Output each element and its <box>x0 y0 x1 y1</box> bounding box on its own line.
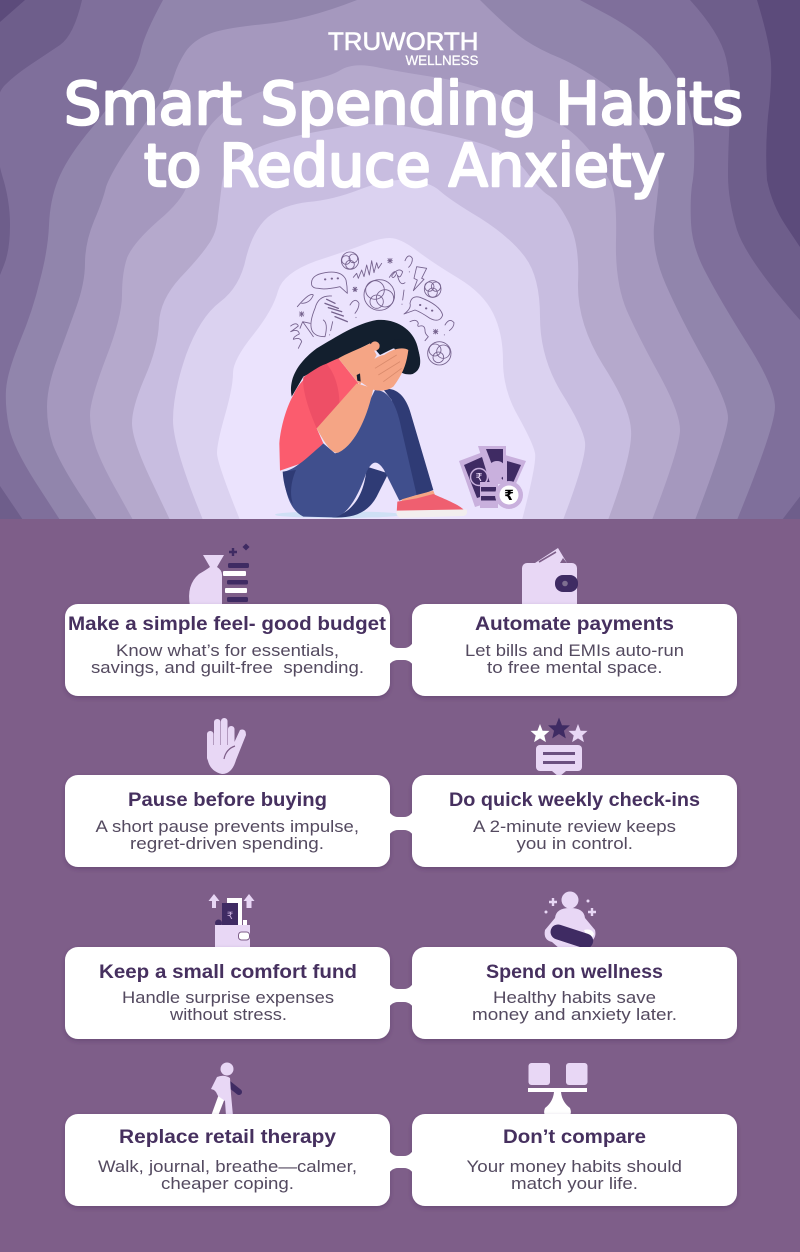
icon: walking person <box>211 1062 239 1116</box>
card: weekly check-ins <box>412 775 737 867</box>
icon: wallet with cash and arrows <box>208 894 254 949</box>
card: spend on wellness: Spend on wellness <box>486 962 663 983</box>
illustration: anxious woman with money <box>275 252 526 518</box>
icon: raised hand <box>207 718 246 774</box>
icon: balance scale <box>528 1063 588 1116</box>
anxious thought doodles <box>291 252 454 365</box>
connectors between cards <box>386 636 416 1179</box>
card: make a simple budget: Know what’s for essentials, <box>116 642 339 660</box>
rupee notes and coins: ₹ <box>476 471 482 484</box>
card: don't compare: match your life. <box>511 1175 638 1193</box>
card: spend on wellness: money and anxiety later. <box>472 1006 677 1024</box>
rupee notes and coins: ₹ <box>504 488 514 504</box>
card: replace retail therapy <box>65 1114 390 1206</box>
card: comfort fund <box>65 947 390 1039</box>
card: make a simple budget: Make a simple feel- good budget <box>68 614 387 635</box>
card: comfort fund: Keep a small comfort fund <box>99 962 357 983</box>
card: automate payments: Let bills and EMIs auto-run <box>465 642 684 660</box>
card: weekly check-ins: you in control. <box>516 835 633 853</box>
card: pause before buying: regret-driven spending. <box>130 835 324 853</box>
card: spend on wellness: Healthy habits save <box>493 989 656 1007</box>
title: to Reduce Anxiety <box>144 131 665 200</box>
card: don't compare <box>412 1114 737 1206</box>
card: pause before buying: A short pause prevents impulse, <box>96 818 359 836</box>
icon: meditating person <box>544 892 596 950</box>
card: replace retail therapy: Replace retail therapy <box>119 1127 336 1148</box>
icon: stars and review bubble <box>530 718 588 777</box>
logo: Truworth Wellness <box>328 28 478 68</box>
card: replace retail therapy: cheaper coping. <box>161 1175 294 1193</box>
icon: wallet <box>522 548 578 609</box>
card: weekly check-ins: Do quick weekly check-ins <box>449 790 700 811</box>
card: don't compare: Don’t compare <box>503 1127 646 1148</box>
icon: money bag and coins <box>189 543 250 606</box>
card: comfort fund: without stress. <box>169 1006 287 1024</box>
lower panel background <box>0 519 800 1252</box>
card: pause before buying: Pause before buying <box>128 790 327 811</box>
card: automate payments <box>412 604 737 696</box>
card: don't compare: Your money habits should <box>466 1158 682 1176</box>
woman sitting with hands over face <box>275 320 467 518</box>
card: automate payments: Automate payments <box>475 614 674 635</box>
rupee notes and coins <box>459 446 526 509</box>
title <box>64 69 743 200</box>
logo: Truworth Wellness: TRUWORTH <box>328 28 478 56</box>
card: spend on wellness <box>412 947 737 1039</box>
card: make a simple budget <box>65 604 390 696</box>
card: pause before buying <box>65 775 390 867</box>
card: automate payments: to free mental space. <box>487 659 662 677</box>
card: comfort fund: Handle surprise expenses <box>122 989 334 1007</box>
logo: Truworth Wellness: WELLNESS <box>406 52 478 68</box>
card: make a simple budget: savings, and guilt-free spending. <box>91 659 364 677</box>
title: Smart Spending Habits <box>64 69 743 138</box>
icon: wallet with cash and arrows: ₹ <box>227 911 233 922</box>
card: weekly check-ins: A 2-minute review keeps <box>473 818 676 836</box>
header background: contour waves <box>0 0 800 520</box>
card: replace retail therapy: Walk, journal, breathe—calmer, <box>98 1158 357 1176</box>
